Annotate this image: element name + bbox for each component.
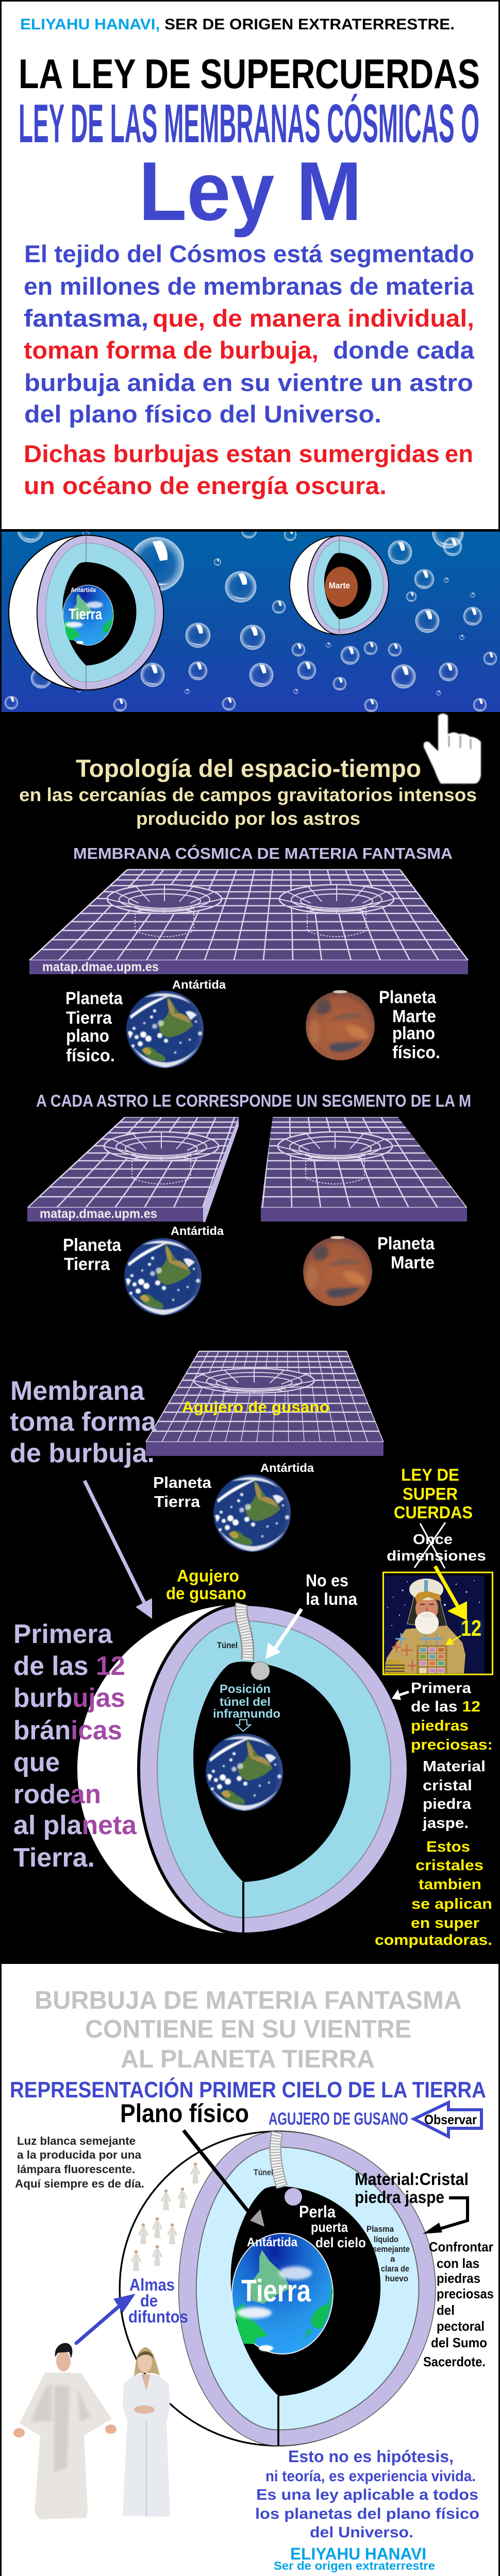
text: membrane takes bubble shape: [10, 1376, 157, 1468]
arrow: small yellow to breastplate: [445, 1636, 461, 1645]
text: crystals applied in supercomputers: tambien: [419, 1876, 481, 1893]
Ley M heading: Ley M: [139, 145, 362, 238]
text: crystals applied in supercomputers: Estos: [426, 1839, 470, 1855]
heading: phantom matter bubble: CONTIENE EN SU VIENTRE: [85, 2015, 411, 2043]
text: first of 12 precious stones: piedra: [423, 1796, 472, 1812]
wormhole tunnel: [241, 1604, 248, 1660]
text: white light: a la producida por una: [17, 2148, 142, 2161]
label souls of the deceased: difuntos: [128, 2307, 188, 2326]
icon: Earth photo: [213, 1475, 291, 1552]
text: material crystal jasper: piedra jaspe: [355, 2188, 444, 2207]
heading: cosmic membrane: MEMBRANA CÓSMICA DE MATERIA FANTASMA: [73, 844, 453, 862]
text: crystals applied in supercomputers: [375, 1839, 492, 1948]
label tunnel: Túnel: [254, 2167, 273, 2177]
label pearl door of heaven: [299, 2202, 366, 2250]
text: white light: [15, 2134, 144, 2190]
text: membrane takes bubble shape: Membrana: [10, 1376, 145, 1406]
label plasma: [366, 2224, 410, 2283]
text: not hypothesis statement: Esto no es hipótesis,: [288, 2447, 454, 2466]
arrow: jasper to ring: [423, 2198, 468, 2234]
text: compare with breastplate stones: piedras: [437, 2270, 480, 2286]
panel: white section background: [2, 1964, 498, 2576]
figure: man in white robe: [13, 2343, 116, 2519]
text: not hypothesis statement: los planetas del plano físico: [255, 2505, 479, 2522]
text: compare with breastplate stones: preciosas: [437, 2286, 494, 2301]
panel: bubbles in dark energy ocean: [2, 517, 500, 712]
arrow: physical plane: [184, 2130, 264, 2227]
text: first of 12 precious stones: [411, 1680, 493, 1832]
label pearl door of heaven: del cielo: [315, 2235, 366, 2250]
icons: small souls: [131, 2163, 201, 2271]
text: white light: Luz blanca semejante: [17, 2134, 136, 2147]
text: eleven dimensions crossed out: Once: [413, 1531, 453, 1547]
label plasma: semejante: [373, 2244, 410, 2254]
text: planet Earth: Planeta: [63, 1235, 122, 1255]
text: planet Mars: Marte: [391, 1253, 435, 1273]
figure: woman in white robe: [123, 2347, 170, 2517]
text: first of 12 brane bubbles: burbujas: [13, 1683, 125, 1713]
grid: cosmic membrane with two wells: [29, 870, 468, 974]
bubble with planet Mars: [290, 536, 389, 635]
text: planet Earth physical plane: Tierra: [66, 1008, 112, 1028]
label plasma: a: [390, 2254, 395, 2264]
text: membrane takes bubble shape: toma forma: [10, 1407, 157, 1437]
label Antártida: Antártida: [247, 2235, 298, 2249]
label Antártida: Antártida: [172, 978, 226, 991]
text: compare with breastplate stones: [423, 2239, 494, 2369]
text: planet Mars physical plane: Marte: [392, 1007, 436, 1026]
dark energy statement: en: [445, 440, 473, 467]
intro paragraph: en millones de membranas de materia: [24, 273, 474, 300]
label souls of the deceased: de: [140, 2291, 158, 2310]
label observe: Observar: [424, 2112, 477, 2127]
text: compare with breastplate stones: pectoral: [437, 2318, 485, 2334]
icon: hollow down arrow: [236, 1720, 251, 1731]
arrow: to first stone: [392, 1689, 409, 1700]
dark energy statement: Dichas burbujas estan sumergidas: [24, 440, 440, 467]
heading: topology of space-time: en las cercanías de campos gravitatorios intensos: [19, 784, 477, 805]
diagram: first bubble around Earth: [77, 1604, 408, 1934]
text: first of 12 brane bubbles: rodean: [13, 1780, 101, 1809]
source label: matap.dmae.upm.es: [40, 1207, 157, 1221]
text: white light: lámpara fluorescente.: [17, 2163, 135, 2176]
label plasma: Plasma: [366, 2224, 394, 2234]
text: planet Earth: Tierra: [154, 1493, 201, 1511]
label underworld tunnel position: [213, 1682, 280, 1720]
text: planet Mars physical plane: plano: [392, 1024, 435, 1043]
text: compare with breastplate stones: del: [437, 2302, 455, 2318]
grid: right membrane segment: [261, 1117, 467, 1222]
text: planet Earth: [63, 1235, 122, 1274]
text: planet Mars physical plane: [379, 988, 440, 1062]
arrow: observe wormhole: [414, 2103, 481, 2137]
text: first of 12 brane bubbles: que: [13, 1748, 60, 1777]
dark energy statement: un océano de energía oscura.: [24, 472, 387, 499]
label Antártida: Antártida: [171, 1224, 224, 1238]
label underworld tunnel position: Posición: [220, 1682, 271, 1696]
cartoon Earth: [232, 2233, 333, 2354]
label not the moon: [306, 1571, 358, 1608]
text: eleven dimensions crossed out: dimensiones: [387, 1548, 486, 1564]
text: not hypothesis statement: del Universo.: [310, 2524, 413, 2541]
label not the moon: No es: [306, 1571, 348, 1590]
label pearl door of heaven: Perla: [299, 2202, 336, 2221]
signature: [274, 2545, 435, 2572]
label Antártida: Antártida: [260, 1461, 314, 1475]
label wormhole: Agujero: [177, 1566, 239, 1585]
label not the moon: la luna: [306, 1589, 358, 1608]
arrow: membrane to bubble: [85, 1481, 152, 1619]
label Tierra: Tierra: [69, 606, 102, 623]
label wormhole: AGUJERO DE GUSANO: [269, 2109, 408, 2129]
label Tierra: Tierra: [241, 2274, 311, 2308]
diagram: first heaven of Earth: [120, 2131, 436, 2446]
number 12: 12: [461, 1616, 481, 1641]
text: planet Earth physical plane: Planeta: [65, 989, 123, 1008]
label pearl door of heaven: puerta: [311, 2219, 348, 2235]
panel: high priest image: [384, 1566, 493, 1674]
intro paragraph: [24, 240, 475, 428]
text: first of 12 precious stones: preciosas:: [411, 1737, 493, 1753]
author line: ELIYAHU HANAVI, SER DE ORIGEN EXTRATERRESTRE.: [20, 16, 455, 33]
text: compare with breastplate stones: Sacerdote.: [423, 2354, 486, 2369]
dark energy statement: [24, 440, 473, 499]
pearl: [251, 1662, 270, 1680]
arrow: to souls: [76, 2294, 136, 2343]
text: first of 12 precious stones: Material: [423, 1758, 486, 1775]
text: compare with breastplate stones: del Sumo: [431, 2335, 487, 2350]
pearl: [285, 2188, 302, 2206]
text: planet Earth physical plane: físico.: [66, 1046, 115, 1065]
text: material crystal jasper: [355, 2170, 469, 2207]
heading: topology of space-time: [19, 755, 477, 829]
text: crystals applied in supercomputers: cristales: [415, 1857, 484, 1874]
grid: left membrane segment: [27, 1117, 239, 1222]
arrow: to pearl: [265, 1609, 302, 1659]
bubbles: [5, 517, 497, 712]
signature: Ser de origen extraterrestre: [274, 2559, 435, 2572]
label wormhole: [166, 1566, 246, 1603]
text: first of 12 precious stones: jaspe.: [422, 1815, 469, 1832]
text: planet Mars: [377, 1234, 435, 1273]
icon: Mars photo: [306, 990, 375, 1060]
text: first of 12 precious stones: cristal: [423, 1777, 472, 1794]
text: planet Earth physical plane: plano: [66, 1026, 109, 1046]
text: not hypothesis statement: ni teoría, es experiencia vivida.: [265, 2468, 476, 2485]
text: first of 12 brane bubbles: Tierra.: [13, 1843, 95, 1873]
text: crystals applied in supercomputers: se aplican: [411, 1896, 492, 1912]
text: planet Earth: Planeta: [153, 1473, 212, 1492]
grid: wormhole membrane: [146, 1351, 384, 1456]
signature: ELIYAHU HANAVI: [290, 2545, 426, 2563]
text: membrane takes bubble shape: de burbuja.: [10, 1438, 155, 1468]
text: white light: Aquí siempre es de día.: [15, 2177, 144, 2190]
Mars: [325, 567, 358, 607]
text: material crystal jasper: Material:Cristal: [355, 2170, 469, 2189]
intro paragraph: del plano físico del Universo.: [24, 400, 381, 428]
heading: phantom matter bubble: [35, 1987, 462, 2073]
label Marte: Marte: [329, 581, 350, 590]
text: superstring law: LEY DE: [401, 1465, 459, 1484]
text: superstring law: CUERDAS: [394, 1503, 473, 1522]
label souls of the deceased: [128, 2275, 188, 2326]
icon: Earth photo: [124, 1238, 202, 1315]
icon: Mars photo: [303, 1236, 372, 1306]
bubble with planet Earth: [9, 535, 163, 690]
text: planet Mars physical plane: físico.: [392, 1043, 440, 1062]
intro paragraph: burbuja anida en su vientre un astro: [24, 369, 473, 396]
text: compare with breastplate stones: Confrontar: [429, 2239, 493, 2255]
text: planet Earth: [153, 1473, 212, 1511]
text: not hypothesis statement: [255, 2447, 479, 2541]
text: planet Earth physical plane: [65, 989, 123, 1065]
text: superstring law: [394, 1465, 473, 1522]
intro paragraph: fantasma,: [24, 304, 148, 332]
text: planet Mars: Planeta: [377, 1234, 435, 1253]
heading: phantom matter bubble: BURBUJA DE MATERIA FANTASMA: [35, 1987, 462, 2014]
label wormhole: de gusano: [166, 1584, 246, 1603]
panel: title and introduction: [2, 2, 498, 529]
icon: Earth photo: [206, 1734, 283, 1811]
text: first of 12 brane bubbles: Primera: [13, 1619, 113, 1649]
label plasma: líquido: [374, 2234, 398, 2244]
text: first of 12 precious stones: Primera: [411, 1680, 472, 1697]
label souls of the deceased: Almas: [129, 2275, 175, 2294]
text: not hypothesis statement: Es una ley aplicable a todos: [256, 2486, 478, 2503]
text: crystals applied in supercomputers: en super: [411, 1915, 479, 1931]
text: first of 12 brane bubbles: bránicas: [13, 1716, 122, 1745]
label Antártida: Antártida: [71, 586, 96, 594]
wormhole tunnel: [275, 2132, 282, 2187]
arrow: yellow to priest: [435, 1566, 467, 1620]
text: planet Earth: Tierra: [64, 1255, 110, 1274]
text: first of 12 precious stones: piedras: [411, 1718, 469, 1734]
text: compare with breastplate stones: con las: [437, 2256, 479, 2271]
cartoon Earth: [63, 585, 113, 645]
label underworld tunnel position: túnel del: [220, 1695, 271, 1708]
text: first of 12 precious stones: de las 12: [411, 1699, 480, 1715]
text: first of 12 brane bubbles: [13, 1619, 137, 1873]
text: crystals applied in supercomputers: computadoras.: [375, 1932, 492, 1948]
label plasma: clara de: [381, 2264, 409, 2274]
text: eleven dimensions crossed out: [387, 1522, 486, 1568]
intro paragraph: que, de manera individual,: [153, 304, 474, 332]
heading: topology of space-time: producido por los astros: [136, 808, 360, 829]
icon: pointing hand cursor: [424, 714, 481, 784]
intro paragraph: El tejido del Cósmos está segmentado: [24, 240, 474, 267]
label tunnel: Túnel: [217, 1640, 238, 1650]
icon: Earth photo: [126, 991, 204, 1068]
label underworld tunnel position: inframundo: [213, 1707, 280, 1720]
text: first of 12 brane bubbles: de las 12: [13, 1651, 125, 1681]
label wormhole: Agujero de gusano: [182, 1399, 329, 1416]
intro paragraph: toman forma de burbuja,: [24, 336, 319, 364]
text: superstring law: SUPER: [403, 1484, 458, 1503]
heading: topology of space-time: Topología del espacio-tiempo: [76, 755, 421, 783]
text: first of 12 brane bubbles: al planeta: [13, 1810, 137, 1840]
label plasma: huevo: [385, 2274, 408, 2283]
text: planet Mars physical plane: Planeta: [379, 988, 437, 1007]
heading: phantom matter bubble: AL PLANETA TIERRA: [121, 2045, 375, 2073]
label physical plane: Plano físico: [120, 2099, 249, 2128]
source label: matap.dmae.upm.es: [42, 960, 159, 974]
intro paragraph: donde cada: [333, 336, 475, 364]
